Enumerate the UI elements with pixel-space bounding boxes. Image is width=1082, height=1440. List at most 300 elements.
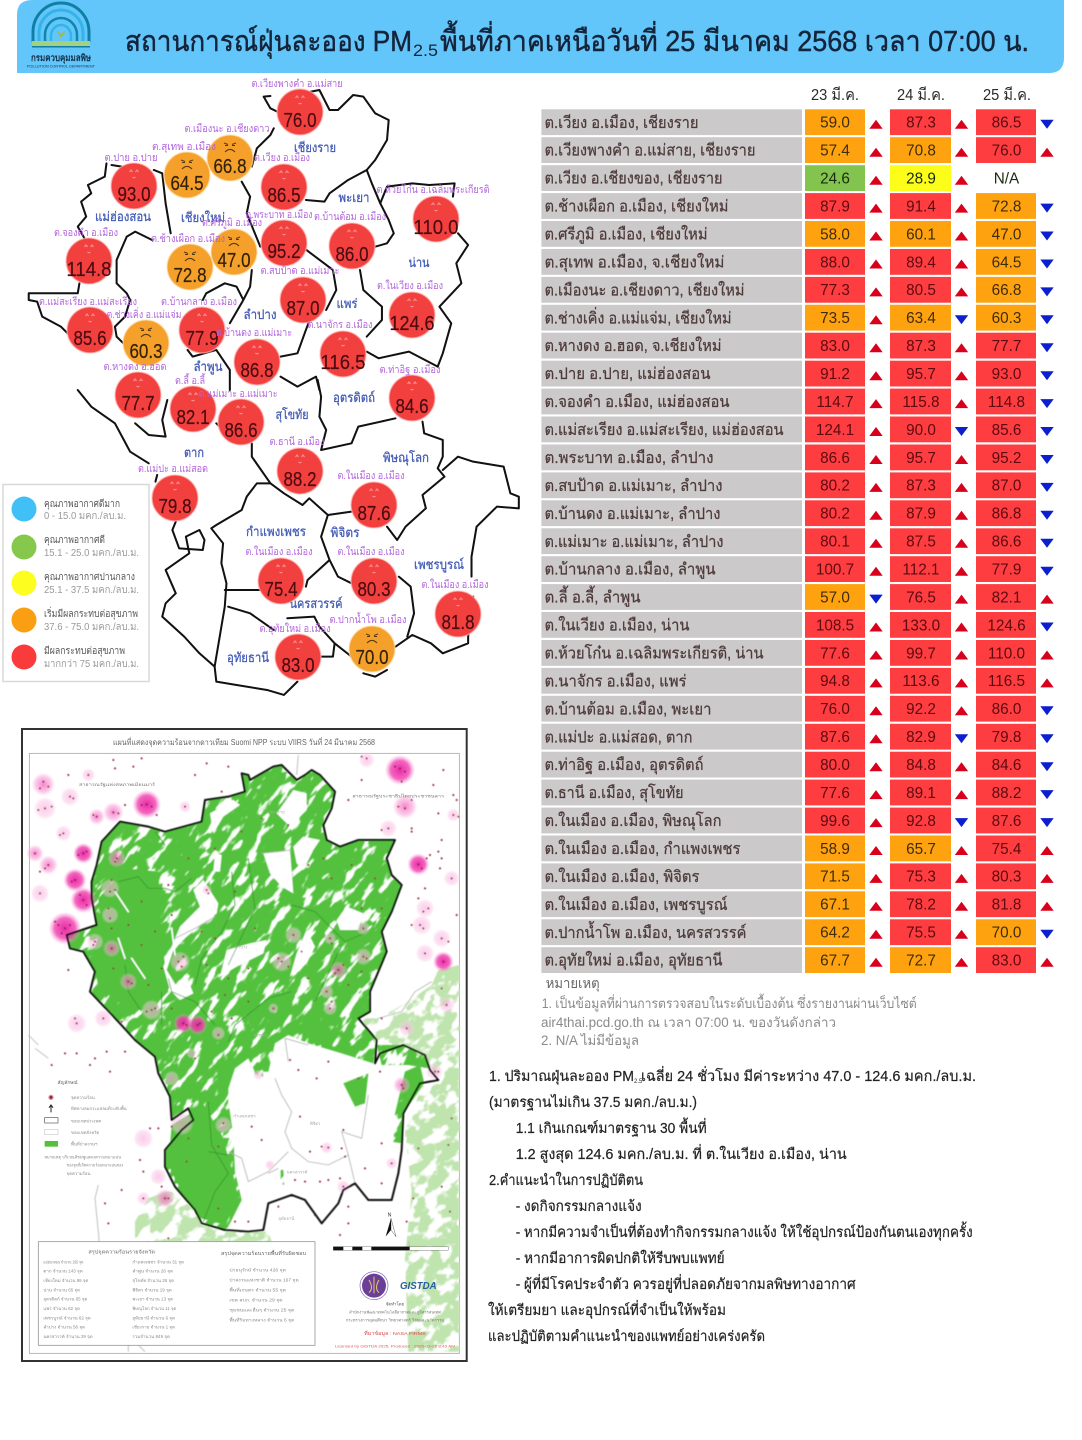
row: Pai <box>541 361 1054 386</box>
row: Mae Pa: ต.แม่ปะ อ.แม่สอด, ตาก <box>544 729 692 746</box>
hotspot summary box: สรุปจุดความร้อนรายพื้นที่รับผิดชอบ <box>221 1248 306 1257</box>
row: Wiang Chiang Khong: 24.6 <box>820 170 850 187</box>
row: Pak Nam Pho: 70.0 <box>992 925 1021 942</box>
row: Thani: 77.6 <box>820 785 850 802</box>
row: Ban Klang: 112.1 <box>902 562 940 579</box>
station bubbles with PM2.5 values: 77.7 <box>122 393 154 415</box>
district boundaries <box>118 832 368 1222</box>
station bubbles with PM2.5 values: 116.5 <box>320 352 366 374</box>
solid forest in western Tak and Mae Hong Son <box>92 868 238 1225</box>
station name labels: ต.ในเมือง อ.เมือง <box>246 545 312 558</box>
table notes: 2. N/A ไม่มีข้อมูล <box>541 1033 639 1049</box>
province name labels: สุโขทัย <box>276 407 308 423</box>
row: Nai Mueang Phichit: 71.5 <box>820 869 850 886</box>
row: Ban Dong: ต.บ้านดง อ.แม่เมาะ, ลำปาง <box>544 505 720 523</box>
hotspot summary box: น่าน จำนวน 65 จุด <box>43 1287 80 1293</box>
map neighbour labels: สาธารณรัฐแห่งสหภาพเมียนมาร์ <box>79 782 156 788</box>
row: Huai Kon: ต.ห้วยโก๋น อ.เฉลิมพระเกียรติ, น่าน <box>544 644 764 662</box>
station bubbles with PM2.5 values: 60.3 <box>130 341 162 363</box>
icon: pollution control department logo <box>27 3 96 68</box>
row: Li: ต.ลี้ อ.ลี้, ลำพูน <box>544 586 641 608</box>
station name labels: ต.พระบาท อ.เมือง <box>246 208 312 221</box>
row: Ban Tom: 76.0 <box>820 701 850 718</box>
row: Pak Nam Pho: 64.2 <box>820 925 850 942</box>
row: Nai Wiang: 124.6 <box>987 617 1026 634</box>
row: Ban Tom: 86.0 <box>992 701 1021 718</box>
hotspot summary box: อุตรดิตถ์ จำนวน 65 จุด <box>43 1297 88 1303</box>
station name labels: ต.บ้านต้อม อ.เมือง <box>314 210 386 223</box>
row: Ban Dong: 87.9 <box>906 506 936 523</box>
station bubbles with PM2.5 values: 70.0 <box>356 647 388 669</box>
row: Pak Nam Pho: 75.5 <box>906 925 936 942</box>
map legend <box>3 484 149 682</box>
row: Ban Tom <box>541 696 1054 722</box>
station bubbles with PM2.5 values: 72.8 <box>174 265 206 287</box>
row: Nai Wiang <box>541 612 1054 638</box>
row: Pai: 93.0 <box>992 366 1021 383</box>
hotspot density glows <box>27 752 460 1208</box>
row: Huai Kon <box>541 640 1054 666</box>
map symbol legend: หมายเหตุ บริเวณสีชมพูแสดงความหนาแน่น <box>44 1154 121 1160</box>
table date headers: 24 มี.ค. <box>897 86 945 104</box>
station name labels: ต.ศรีภูมิ อ.เมือง <box>202 216 262 229</box>
row: Si Phum: 58.0 <box>820 226 850 243</box>
row: Wiang Chiang Khong <box>541 165 1020 191</box>
map legend: มากกว่า 75 มคก./ลบ.ม. <box>44 659 139 670</box>
row: Nai Mueang Phichit <box>541 863 1054 889</box>
row: Thani: 88.2 <box>992 785 1021 802</box>
title: 2.5 <box>413 41 438 60</box>
station bubbles with PM2.5 values: 110.0 <box>414 217 458 239</box>
row: Nai Mueang Phetchabun: 78.2 <box>906 897 936 914</box>
hotspot summary box: พิษณุโลก จำนวน 11 จุด <box>132 1305 177 1312</box>
table notes: หมายเหตุ <box>546 975 600 992</box>
station name labels: ต.เวียงพางคำ อ.แม่สาย <box>252 77 342 90</box>
row: Nai Mueang Phitsanulok: ต.ในเมือง อ.เมือง, พิษณุโลก <box>544 811 722 831</box>
row: Nai Mueang Phetchabun: 81.8 <box>992 897 1021 914</box>
row: Tha It: 80.0 <box>820 757 850 774</box>
map credits: สำนักงานพัฒนาเทคโนโลยีอวกาศและภูมิสารสนเทศ <box>349 1309 441 1315</box>
map legend: 15.1 - 25.0 มคก./ลบ.ม. <box>44 548 139 559</box>
row: Pai: ต.ปาย อ.ปาย, แม่ฮ่องสอน <box>544 366 711 383</box>
map neighbour labels: สุโขทัย <box>253 1032 267 1039</box>
hotspot summary box: เพชรบูรณ์ จำนวน 62 จุด <box>43 1315 91 1321</box>
row: Huai Kon: 77.6 <box>820 645 850 662</box>
row: Sop Pad: ต.สบป้าด อ.แม่เมาะ, ลำปาง <box>544 477 722 495</box>
station name labels: ต.แม่ปะ อ.แม่สอด <box>138 463 208 475</box>
station bubbles with PM2.5 values: 114.8 <box>66 259 112 281</box>
map neighbour labels: ลำปาง <box>235 944 247 949</box>
GISTDA logo text: GISTDA <box>400 1281 437 1292</box>
summary and health advice text: - ผู้ที่มีโรคประจำตัว ควรอยู่ที่ปลอดภัยจากมลพิษทางอากาศ <box>516 1274 856 1293</box>
row: Nai Mueang Kamphaeng Phet: ต.ในเมือง อ.เมือง, กำแพงเพชร <box>544 839 741 858</box>
hotspot summary box: พะเยา จำนวน 13 จุด <box>132 1297 173 1303</box>
row: Chang Phueak <box>541 193 1054 219</box>
row: Ban Dong <box>541 500 1054 526</box>
hotspot summary box: สุโขทัย จำนวน 26 จุด <box>132 1277 174 1284</box>
row: Nai Mueang Phichit: 80.3 <box>992 869 1021 886</box>
station bubbles with PM2.5 values: 86.8 <box>240 360 274 382</box>
station name labels: ต.สุเทพ อ.เมือง <box>152 140 216 153</box>
summary and health advice text: เฉลี่ย 24 ชั่วโมง มีค่าระหว่าง 47.0 - 124.6 มคก./ลบ.ม. <box>641 1066 976 1085</box>
station name labels: ต.อุทัยใหม่ อ.เมือง <box>260 622 330 635</box>
row: Si Phum: 60.1 <box>906 226 936 243</box>
province boundaries <box>29 90 519 695</box>
row: Pak Nam Pho <box>541 919 1054 945</box>
station bubbles with PM2.5 values: 84.6 <box>396 396 428 418</box>
row: Nai Mueang Kamphaeng Phet: 65.7 <box>906 841 936 858</box>
row: Wiang Chiang Rai: ต.เวียง อ.เมือง, เชียงราย <box>544 114 698 132</box>
satellite map title: แผนที่แสดงจุดความร้อนจากดาวเทียม Suomi NPP ระบบ VIIRS วันที่ 24 มีนาคม 2568 <box>113 736 375 747</box>
row: Thani: 89.1 <box>906 785 936 802</box>
station bubbles with PM2.5 values: 75.4 <box>264 579 298 601</box>
map neighbour labels: อุทัยธานี <box>278 1216 294 1222</box>
row: Nai Mueang Kamphaeng Phet <box>541 836 1054 861</box>
station name labels: ต.ในเมือง อ.เมือง <box>338 545 404 558</box>
row: Nai Mueang Phitsanulok: 92.8 <box>906 813 936 830</box>
province name labels: แม่ฮ่องสอน <box>95 209 151 224</box>
cleared land <box>163 790 363 1000</box>
station name labels: ต.บ้านดง อ.แม่เมาะ <box>216 327 292 339</box>
row: Nai Mueang Phetchabun: 67.1 <box>820 897 850 914</box>
province name labels: ตาก <box>184 445 204 460</box>
row: Pai: 91.2 <box>820 366 850 383</box>
row: Sop Pad: 87.0 <box>992 478 1021 495</box>
title: พื้นที่ภาคเหนือวันที่ 25 มีนาคม 2568 เวลา 07:00 น. <box>440 20 1029 58</box>
row: Na Chak: 116.5 <box>988 673 1025 690</box>
panel: station data table <box>541 86 1054 973</box>
station name labels: ต.ปากน้ำโพ อ.เมือง <box>330 612 406 626</box>
row: Chong Kham <box>541 389 1054 414</box>
map symbol legend: ของจุดที่เกิดความร้อนหนาแน่นของ <box>67 1162 123 1169</box>
summary and health advice text: 1. ปริมาณฝุ่นละออง PM <box>489 1069 634 1085</box>
map legend: คุณภาพอากาศดี <box>44 534 105 546</box>
station bubbles with PM2.5 values: 80.3 <box>358 579 390 601</box>
row: Nai Mueang Phetchabun: ต.ในเมือง อ.เมือง, เพชรบูรณ์ <box>544 895 728 915</box>
map symbol legend: ทิศทางลมกระแสลมที่ระดับพื้น <box>71 1105 127 1111</box>
summary and health advice text: 1.1 เกินเกณฑ์มาตรฐาน 30 พื้นที่ <box>516 1117 707 1137</box>
row: Chang Khoeng: ต.ช่างเคิ่ง อ.แม่แจ่ม, เชียงใหม่ <box>544 306 732 327</box>
title <box>125 20 1029 60</box>
hotspot summary box <box>38 1242 315 1345</box>
station bubbles with PM2.5 values: 79.8 <box>158 496 192 518</box>
table date headers: 25 มี.ค. <box>983 86 1031 104</box>
province name labels: พิจิตร <box>330 525 360 540</box>
province name labels: พิษณุโลก <box>383 450 429 466</box>
row: Ban Klang <box>541 556 1054 582</box>
row: Na Chak <box>541 668 1054 694</box>
hotspot summary box: รวมจำนวน 849 จุด <box>132 1334 170 1340</box>
icon: pollution control department logo: POLLUTION CONTROL DEPARTMENT <box>27 64 96 68</box>
light green neighbouring forest <box>0 805 650 1440</box>
station name labels: ต.เวียง อ.เมือง <box>254 151 310 164</box>
summary and health advice text: ให้เตรียมยา และอุปกรณ์ที่จำเป็นให้พร้อม <box>488 1300 726 1319</box>
station name labels: ต.ห้วยโก๋น อ.เฉลิมพระเกียรติ <box>376 183 490 196</box>
row: Hang Dong: 83.0 <box>820 338 850 355</box>
station bubbles with PM2.5 values: 81.8 <box>442 612 474 634</box>
row: Hang Dong <box>541 333 1054 358</box>
row: Chang Phueak: 87.9 <box>820 198 850 215</box>
row: Tha It: 84.8 <box>906 757 936 774</box>
map neighbour labels <box>79 782 445 1222</box>
map credits <box>335 1301 455 1349</box>
province name labels: เชียงใหม่ <box>181 210 225 225</box>
table notes <box>541 975 917 1049</box>
row: Pai: 95.7 <box>906 366 936 383</box>
station bubbles with PM2.5 values: 85.6 <box>74 328 106 350</box>
row: Ban Klang: 100.7 <box>816 562 854 579</box>
row: Nai Mueang Phetchabun <box>541 891 1054 917</box>
summary and health advice text: 1.2 สูงสุด 124.6 มคก./ลบ.ม. ที่ ต.ในเวียง อ.เมือง, น่าน <box>516 1144 847 1163</box>
hotspot summary box: พื้นที่ริมทางหลวง จำนวน 6 จุด <box>229 1317 295 1324</box>
map symbol legend: สัญลักษณ์ <box>58 1079 78 1086</box>
row: Phra Bat: 86.6 <box>820 450 850 467</box>
map neighbour labels: พิจิตร <box>310 1121 321 1126</box>
station bubbles with PM2.5 values: 87.0 <box>286 298 320 320</box>
map neighbour labels: สาธารณรัฐประชาธิปไตยประชาชนลาว <box>352 794 445 800</box>
station bubbles with PM2.5 values: 87.6 <box>358 503 390 525</box>
national boundary of study area <box>67 765 438 1232</box>
row: Suthep: 88.0 <box>820 254 850 271</box>
station name labels <box>39 77 490 635</box>
row: Si Phum: 47.0 <box>992 226 1021 243</box>
map legend: เริ่มมีผลกระทบต่อสุขภาพ <box>44 606 138 620</box>
row: Sop Pad: 87.3 <box>906 478 936 495</box>
province name labels: เพชรบูรณ์ <box>414 557 464 573</box>
row: Li: 82.1 <box>992 589 1021 606</box>
station bubbles with PM2.5 values: 93.0 <box>118 184 150 206</box>
map symbol legend: จุดความร้อน <box>71 1095 95 1101</box>
row: Nai Mueang Phichit: ต.ในเมือง อ.เมือง, พิจิตร <box>544 867 700 886</box>
station name labels: ต.ในเมือง อ.เมือง <box>338 469 404 482</box>
row: Li <box>541 584 1054 610</box>
row: Si Phum: ต.ศรีภูมิ อ.เมือง, เชียงใหม่ <box>544 224 708 244</box>
row: Wiang Chiang Rai: 86.5 <box>992 115 1021 132</box>
summary and health advice text: - งดกิจกรรมกลางแจ้ง <box>516 1198 642 1215</box>
hotspot summary box: ลำพูน จำนวน 26 จุด <box>132 1269 173 1275</box>
row: Phra Bat: 95.2 <box>992 450 1021 467</box>
map symbol legend: พื้นที่ป่าสงวนฯ <box>71 1141 98 1147</box>
row: Na Chak: 94.8 <box>820 673 850 690</box>
row: Mae Sariang: 85.6 <box>992 422 1021 439</box>
satellite map artwork <box>0 590 654 1440</box>
row: Ban Klang: 77.9 <box>992 562 1021 579</box>
province name labels: นครสวรรค์ <box>290 596 342 611</box>
row: Chang Khoeng: 60.3 <box>992 310 1021 327</box>
station bubbles with PM2.5 values: 47.0 <box>218 250 250 272</box>
row: Mae Sariang <box>541 416 1054 442</box>
row: Chang Khoeng: 63.4 <box>906 310 936 327</box>
row: Mae Mo: ต.แม่เมาะ อ.แม่เมาะ, ลำปาง <box>544 534 724 551</box>
row: Wiang Phang Kham: 57.4 <box>820 142 850 159</box>
row: Mae Sariang: 90.0 <box>906 422 936 439</box>
row: Wiang Chiang Rai <box>541 109 1054 135</box>
row: Tha It: 84.6 <box>992 757 1021 774</box>
icon: north arrow <box>386 1213 396 1237</box>
province name labels: กำแพงเพชร <box>246 524 306 539</box>
station bubbles with PM2.5 values: 66.8 <box>214 156 246 178</box>
row: Suthep <box>541 249 1054 275</box>
station name labels: ต.แม่เมาะ อ.แม่เมาะ <box>198 388 278 400</box>
summary and health advice text: - หากมีความจำเป็นที่ต้องทำกิจกรรมกลางแจ้ง ให้ใช้อุปกรณ์ป้องกันตนเองทุกครั้ง <box>516 1221 973 1241</box>
hotspot summary box: แม่ฮ่องสอน จำนวน 195 จุด <box>43 1259 83 1265</box>
row: Uthai Mai: 67.7 <box>820 953 850 970</box>
station bubbles with PM2.5 values <box>66 89 481 680</box>
row: Huai Kon: 99.7 <box>906 645 936 662</box>
row: Nai Wiang: 133.0 <box>902 617 940 634</box>
hotspot summary box: ชุมชนและอื่นๆ จำนวน 25 จุด <box>229 1307 295 1314</box>
station name labels: ต.ท่าอิฐ อ.เมือง <box>380 363 440 376</box>
map legend: 0 - 15.0 มคก./ลบ.ม. <box>44 511 126 522</box>
row: Uthai Mai <box>541 947 1054 973</box>
row: Tha It <box>541 752 1054 778</box>
summary and health advice text <box>488 1066 976 1345</box>
map neighbour labels: กำแพงเพชร <box>233 1114 256 1119</box>
hotspot summary box: ป่าสงวนแห่งชาติ จำนวน 167 จุด <box>229 1278 299 1284</box>
row: Nai Mueang Phitsanulok <box>541 808 1054 833</box>
row: Tha It: ต.ท่าอิฐ อ.เมือง, อุตรดิตถ์ <box>544 755 704 775</box>
map legend: คุณภาพอากาศปานกลาง <box>44 572 135 583</box>
row: Phra Bat: ต.พระบาท อ.เมือง, ลำปาง <box>544 449 714 467</box>
row: Nai Mueang Kamphaeng Phet: 75.4 <box>992 841 1022 858</box>
station bubbles with PM2.5 values: 64.5 <box>170 173 204 195</box>
table notes: air4thai.pcd.go.th ณ เวลา 07:00 น. ของวันดังกล่าว <box>541 1015 836 1030</box>
row: Hang Dong: 87.3 <box>906 338 936 355</box>
map legend: คุณภาพอากาศดีมาก <box>44 498 120 510</box>
scale bar <box>333 1247 448 1250</box>
map credits: Licensed by GISTDA 2025, Produced : 2025-03-25 8:43 AM <box>335 1345 455 1349</box>
row: Chong Kham: 114.7 <box>816 394 854 411</box>
province name labels: น่าน <box>408 255 430 270</box>
table date headers <box>811 86 1031 104</box>
map symbol legend: ขอบเขตประเทศ <box>71 1118 101 1123</box>
station bubbles with PM2.5 values: 88.2 <box>284 469 316 491</box>
icon: pollution control department logo: กรมควบคุมมลพิษ <box>31 53 92 64</box>
panel: satellite hotspot map <box>0 590 654 1440</box>
hotspot summary box: กำแพงเพชร จำนวน 31 จุด <box>132 1259 184 1265</box>
map legend: 37.6 - 75.0 มคก./ลบ.ม. <box>44 622 139 633</box>
row: Nai Mueang Phitsanulok: 87.6 <box>992 813 1021 830</box>
row: Chong Kham: 114.8 <box>988 394 1025 411</box>
station bubbles with PM2.5 values: 95.2 <box>268 241 300 263</box>
map legend: มีผลกระทบต่อสุขภาพ <box>44 645 125 657</box>
hotspot summary box: อุทัยธานี จำนวน 6 จุด <box>132 1315 175 1321</box>
station bubbles with PM2.5 values: 83.0 <box>282 655 314 677</box>
hotspot summary box: เชียงใหม่ จำนวน 99 จุด <box>43 1278 89 1284</box>
header banner <box>17 0 1064 73</box>
province name labels: แพร่ <box>336 296 358 311</box>
station name labels: ต.หางดง อ.ฮอด <box>104 361 166 373</box>
province name labels: พะเยา <box>338 190 370 205</box>
row: Mae Pa <box>541 724 1054 750</box>
row: Mae Sariang: ต.แม่สะเรียง อ.แม่สะเรียง, แม่ฮ่องสอน <box>544 421 784 439</box>
row: Thani <box>541 780 1054 805</box>
map legend: 25.1 - 37.5 มคก./ลบ.ม. <box>44 585 139 596</box>
station bubbles with PM2.5 values: 77.9 <box>186 328 218 350</box>
province name labels: ลำปาง <box>244 307 276 322</box>
row: Nai Mueang Phichit: 75.3 <box>906 869 936 886</box>
station name labels: ต.ช้างเผือก อ.เมือง <box>151 232 225 245</box>
hotspot summary box: ป่าอนุรักษ์ จำนวน 426 จุด <box>229 1268 286 1274</box>
row: Ban Dong: 80.2 <box>820 506 850 523</box>
station name labels: ต.ธานี อ.เมือง <box>270 435 324 448</box>
station bubbles with PM2.5 values: 86.6 <box>224 420 258 442</box>
station bubbles with PM2.5 values: 76.0 <box>284 110 316 132</box>
hotspot dots <box>35 757 458 1238</box>
row: Mae Mo: 86.6 <box>992 534 1021 551</box>
row: Wiang Chiang Rai: 59.0 <box>820 115 850 132</box>
hotspot summary box: สรุปจุดความร้อนรายจังหวัด <box>88 1248 155 1255</box>
hotspot summary box: เชียงราย จำนวน 1 จุด <box>132 1325 175 1331</box>
row: Li: 57.0 <box>820 589 850 606</box>
station name labels: ต.ลี้ อ.ลี้ <box>175 373 206 387</box>
table notes: 1. เป็นข้อมูลที่ผ่านการตรวจสอบในระดับเบื้องต้น ซึ่งรายงานผ่านเว็บไซต์ <box>542 993 917 1012</box>
summary and health advice text: (มาตรฐานไม่เกิน 37.5 มคก./ลบ.ม.) <box>489 1093 697 1111</box>
map credits: จัดทำโดย <box>386 1301 405 1307</box>
icon: north arrow: N <box>388 1213 392 1219</box>
province name labels: เชียงราย <box>294 140 336 155</box>
station name labels: ต.เมืองนะ อ.เชียงดาว <box>184 122 270 135</box>
row: Wiang Chiang Khong: ต.เวียง อ.เชียงของ, เชียงราย <box>544 170 722 188</box>
row: Pak Nam Pho: ต.ปากน้ำโพ อ.เมือง, นครสวรรค์ <box>544 921 746 942</box>
row: Ban Klang: ต.บ้านกลาง อ.เมือง, ลำพูน <box>544 561 716 580</box>
province name labels: ลำพูน <box>194 359 223 375</box>
row: Chang Khoeng <box>541 305 1054 331</box>
title: สถานการณ์ฝุ่นละออง PM <box>125 25 412 59</box>
row: Mueang Na: ต.เมืองนะ อ.เชียงดาว, เชียงใหม่ <box>544 280 744 299</box>
row: Chong Kham: ต.จองคำ อ.เมือง, แม่ฮ่องสอน <box>544 393 730 411</box>
row: Mueang Na: 66.8 <box>992 282 1021 299</box>
province name labels: อุตรดิตถ์ <box>333 390 375 406</box>
row: Mae Mo: 80.1 <box>820 534 850 551</box>
panel: northern provinces PM2.5 map <box>3 77 519 695</box>
row: Wiang Chiang Khong: N/A <box>994 170 1020 187</box>
station bubbles with PM2.5 values: 82.1 <box>176 407 210 429</box>
row: Nai Mueang Kamphaeng Phet: 58.9 <box>820 841 850 858</box>
row: Li: 76.5 <box>906 589 936 606</box>
row: Na Chak: ต.นาจักร อ.เมือง, แพร่ <box>544 672 687 690</box>
row: Mueang Na: 77.3 <box>820 282 850 299</box>
map symbol legend: จุดความร้อน <box>67 1171 91 1177</box>
row: Chang Phueak: ต.ช้างเผือก อ.เมือง, เชียงใหม่ <box>544 197 728 216</box>
hotspot summary box: พื้นที่เกษตร จำนวน 55 จุด <box>229 1287 286 1294</box>
row: Chang Phueak: 91.4 <box>906 198 936 215</box>
row: Wiang Phang Kham <box>541 137 1054 163</box>
row: Si Phum <box>541 221 1054 247</box>
icon: ministry seal <box>360 1272 388 1300</box>
row: Wiang Phang Kham: 76.0 <box>992 142 1021 159</box>
row: Ban Dong: 86.8 <box>992 506 1021 523</box>
map credits: กระทรวงการอุดมศึกษา วิทยาศาสตร์ วิจัยและนวัตกรรม <box>346 1318 445 1324</box>
row: Mueang Na: 80.5 <box>906 282 936 299</box>
row: Wiang Chiang Rai: 87.3 <box>906 115 936 132</box>
map neighbour labels: นครสวรรค์ <box>287 1169 308 1174</box>
station name labels: ต.นาจักร อ.เมือง <box>308 318 372 331</box>
station name labels: ต.สบป้าด อ.แม่เมาะ <box>260 265 340 277</box>
summary and health advice text: 2.คำแนะนำในการปฏิบัติตน <box>489 1171 643 1189</box>
row: Suthep: 89.4 <box>906 254 936 271</box>
row: Ban Tom: ต.บ้านต้อม อ.เมือง, พะเยา <box>544 700 712 718</box>
row: Nai Mueang Phitsanulok: 99.6 <box>820 813 850 830</box>
station bubbles with PM2.5 values: 86.5 <box>268 185 300 207</box>
row: Uthai Mai: 83.0 <box>992 953 1021 970</box>
row: Thani: ต.ธานี อ.เมือง, สุโขทัย <box>544 783 684 803</box>
row: Mueang Na <box>541 277 1054 303</box>
row: Suthep: 64.5 <box>992 254 1021 271</box>
row: Chang Khoeng: 73.5 <box>820 310 850 327</box>
hotspot summary box: แพร่ จำนวน 62 จุด <box>43 1306 80 1312</box>
row: Hang Dong: ต.หางดง อ.ฮอด, จ.เชียงใหม่ <box>544 336 722 355</box>
